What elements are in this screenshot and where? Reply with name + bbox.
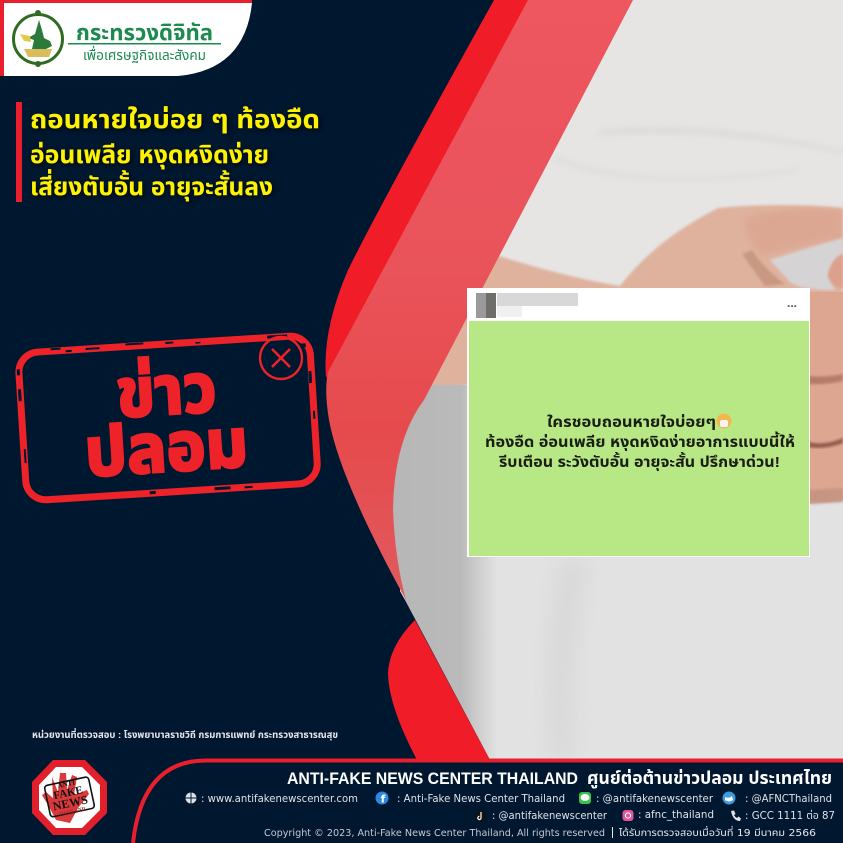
footer contacts row two: : @antifakenewscenter <box>492 810 608 822</box>
red diagonal stripe <box>325 0 532 378</box>
footer contacts row two: : afnc_thailand <box>638 809 714 821</box>
footer contacts row one: : www.antifakenewscenter.com <box>201 793 358 805</box>
heading block: เสี่ยงตับอั้น อายุจะสั้นลง <box>30 169 273 202</box>
icon: facebook: f <box>381 792 386 806</box>
footer contacts row one: : @AFNCThailand <box>745 793 832 805</box>
footer contacts row one <box>186 792 832 806</box>
anti-fake news stop logo: NEWS <box>52 792 89 813</box>
green post background <box>469 321 809 556</box>
shirt under fingers <box>770 238 843 290</box>
heading block: อ่อนเพลีย หงุดหงิดง่าย <box>30 141 269 170</box>
footer panel with red curve <box>131 760 843 843</box>
source line: หน่วยงานที่ตรวจสอบ : โรงพยาบาลราชวิถี กรมการแพทย์ กระทรวงสาธารณสุข <box>32 728 338 741</box>
icon: tiktok <box>476 810 486 822</box>
icon: phone <box>731 810 741 821</box>
icon: ministry emblem <box>14 10 62 67</box>
post text: ใครชอบถอนหายใจบ่อยๆ <box>547 413 716 431</box>
anti-fake news stop logo: ANTI <box>57 778 76 790</box>
copyright line <box>264 825 816 839</box>
footer title: ศูนย์ต่อต้านข่าวปลอม ประเทศไทย <box>587 768 832 789</box>
anti-fake news stop logo: FAKE <box>52 784 84 802</box>
ministry logo panel <box>0 0 252 76</box>
social post card: ท้องอืด อ่อนเพลีย หงุดหงิดง่ายอาการแบบนี้ให้ <box>485 431 795 451</box>
menu dots: ... <box>787 296 797 310</box>
footer contacts row one: : Anti-Fake News Center Thailand <box>397 793 565 805</box>
blurred avatar and name <box>476 293 578 318</box>
stamp text: ข่าว <box>114 350 219 432</box>
icon: instagram <box>622 810 634 821</box>
anti-fake news stop logo <box>32 760 107 835</box>
ministry tagline: เพื่อเศรษฐกิจและสังคม <box>83 45 206 63</box>
ministry name: กระทรวงดิจิทัล <box>76 20 213 45</box>
anti-fake news stop logo: THAILAND <box>59 807 86 817</box>
footer title <box>287 768 832 789</box>
translucent pink band <box>326 0 633 600</box>
gray shirt lower-left shade <box>385 385 497 760</box>
icon: red hand <box>42 773 89 823</box>
social post card <box>467 288 810 557</box>
heading block <box>16 102 320 202</box>
footer contacts row two <box>476 809 835 822</box>
icon: emoji <box>716 414 732 428</box>
stamp grunge specks <box>16 332 319 502</box>
photo: person holding stomach <box>400 0 843 760</box>
icon: globe <box>186 792 196 804</box>
navy background panel <box>0 0 494 760</box>
footer title: ANTI-FAKE NEWS CENTER THAILAND <box>287 769 578 788</box>
icon: cross in circle <box>260 337 302 379</box>
icon: line <box>579 792 591 804</box>
footer contacts row one: : @antifakenewscenter <box>596 793 714 805</box>
social post card: รีบเตือน ระวังตับอั้น อายุจะสั้น ปรึกษาด่วน! <box>498 452 780 471</box>
red rounded blob bottom <box>388 620 490 760</box>
icon: facebook <box>376 792 388 806</box>
icon: twitter <box>722 792 736 804</box>
copyright line: Copyright © 2023, Anti-Fake News Center Thailand, All rights reserved <box>264 828 605 839</box>
skin of torso and hand <box>425 205 843 504</box>
fingers right of card <box>808 292 843 500</box>
footer contacts row two: : GCC 1111 ต่อ 87 <box>745 809 835 822</box>
heading block: ถอนหายใจบ่อย ๆ ท้องอืด <box>30 104 320 134</box>
fake news stamp <box>16 332 319 502</box>
fake news stamp: ปลอม <box>83 405 250 491</box>
copyright line: ได้รับการตรวจสอบเมื่อวันที่ 19 มีนาคม 2566 <box>618 825 816 839</box>
